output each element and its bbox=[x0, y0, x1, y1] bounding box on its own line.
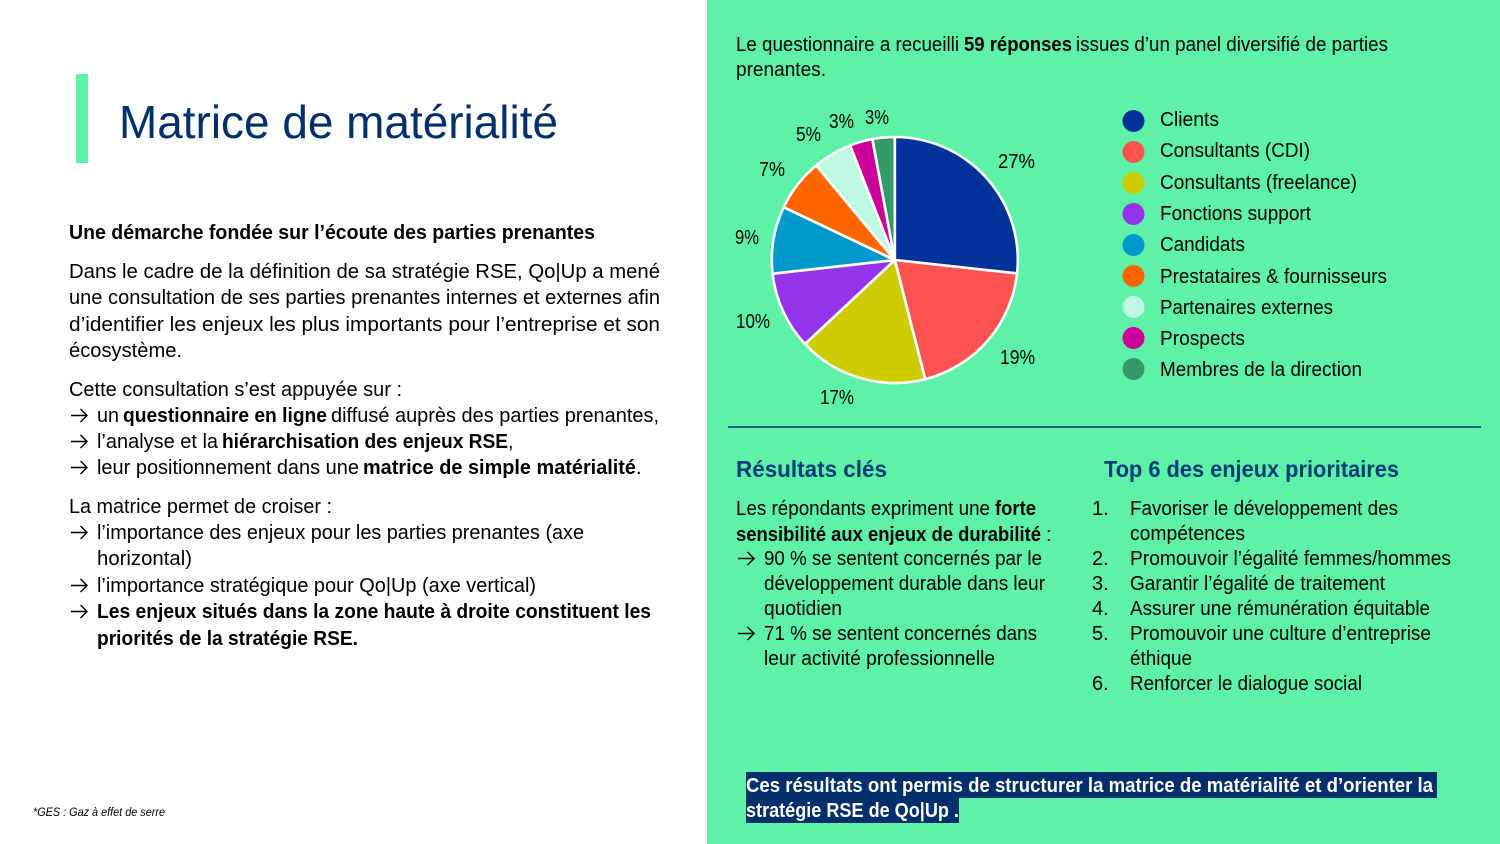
legend: Consultants (freelance) bbox=[1160, 172, 1357, 194]
intro text: responses: prenantes. bbox=[736, 59, 826, 81]
panel: right green background bbox=[707, 0, 1500, 844]
list: consultation: leur positionnement dans une bbox=[97, 457, 359, 479]
panel: top 6 bbox=[1092, 456, 1451, 695]
numbered list bbox=[1092, 498, 1451, 695]
numbered list: Renforcer le dialogue social bbox=[1130, 673, 1362, 695]
list: consultation: hiérarchisation des enjeux RSE bbox=[222, 431, 508, 453]
list: matrix axes: l’importance des enjeux pour les parties prenantes (axe bbox=[97, 522, 584, 544]
heading: key results: Résultats clés bbox=[736, 456, 887, 482]
paragraph: intro: d’identifier les enjeux les plus importants pour l’entreprise et son bbox=[69, 314, 660, 336]
numbered list: 4. bbox=[1092, 598, 1109, 620]
list: matrix axes: l’importance stratégique pour Qo|Up (axe vertical) bbox=[97, 575, 536, 597]
panel: key results bbox=[736, 456, 1052, 670]
intro text: responses bbox=[736, 34, 1388, 81]
numbered list: Assurer une rémunération équitable bbox=[1130, 598, 1430, 620]
list: consultation: l’analyse et la bbox=[97, 431, 219, 453]
list: consultation: , bbox=[508, 431, 514, 453]
intro text: responses: 59 réponses bbox=[964, 34, 1072, 56]
numbered list: 1. bbox=[1092, 498, 1109, 520]
pie percentage labels: 10% bbox=[736, 311, 770, 333]
key results text: 90 % se sentent concernés par le bbox=[764, 548, 1042, 570]
title: Matrice de matérialité bbox=[119, 96, 558, 148]
numbered list: 5. bbox=[1092, 623, 1109, 645]
legend: Candidats bbox=[1160, 234, 1245, 256]
pie percentage labels: 9% bbox=[735, 227, 759, 249]
list: consultation: diffusé auprès des parties prenantes, bbox=[331, 405, 659, 427]
callout: conclusion: Ces résultats ont permis de structurer la matrice de matérialité et d’orienter la bbox=[746, 775, 1434, 797]
numbered list: Garantir l’égalité de traitement bbox=[1130, 573, 1385, 595]
title accent bar bbox=[76, 74, 88, 163]
pie percentage labels bbox=[735, 107, 1035, 409]
legend bbox=[1122, 109, 1387, 381]
numbered list: éthique bbox=[1130, 648, 1192, 670]
paragraph: intro bbox=[69, 261, 660, 362]
numbered list: 3. bbox=[1092, 573, 1109, 595]
list: consultation bbox=[69, 379, 659, 479]
legend: Prestataires & fournisseurs bbox=[1160, 266, 1387, 288]
legend: Partenaires externes bbox=[1160, 297, 1333, 319]
list: matrix axes: La matrice permet de croiser : bbox=[69, 496, 332, 518]
callout: conclusion bbox=[746, 772, 1437, 823]
pie percentage labels: 3% bbox=[865, 107, 889, 129]
pie percentage labels: 3% bbox=[829, 111, 854, 133]
pie percentage labels: 7% bbox=[759, 159, 785, 181]
legend: Membres de la direction bbox=[1160, 359, 1362, 381]
list: consultation: . bbox=[636, 457, 642, 479]
legend: Clients bbox=[1160, 109, 1219, 131]
key results text: 71 % se sentent concernés dans bbox=[764, 623, 1037, 645]
pie percentage labels: 17% bbox=[820, 387, 854, 409]
list: matrix axes bbox=[69, 496, 651, 650]
paragraph: intro: une consultation de ses parties prenantes internes et externes afin bbox=[69, 287, 660, 309]
key results text: forte bbox=[995, 498, 1036, 520]
list: consultation: questionnaire en ligne bbox=[123, 405, 327, 427]
legend: Fonctions support bbox=[1160, 203, 1311, 225]
numbered list: compétences bbox=[1130, 523, 1245, 545]
list: matrix axes: priorités de la stratégie RSE. bbox=[97, 628, 358, 650]
list: consultation: matrice de simple matérialité bbox=[363, 457, 636, 479]
key results text: sensibilité aux enjeux de durabilité bbox=[736, 524, 1041, 546]
key results text bbox=[736, 498, 1052, 670]
paragraph: intro: Dans le cadre de la définition de sa stratégie RSE, Qo|Up a mené bbox=[69, 261, 660, 283]
heading: top 6: Top 6 des enjeux prioritaires bbox=[1104, 456, 1399, 482]
paragraph: intro: écosystème. bbox=[69, 340, 182, 362]
numbered list: 6. bbox=[1092, 673, 1109, 695]
intro text: responses: issues d’un panel diversifié de parties bbox=[1076, 34, 1388, 56]
key results text: quotidien bbox=[764, 598, 842, 620]
subheading: Une démarche fondée sur l’écoute des parties prenantes bbox=[69, 222, 595, 244]
list: consultation: un bbox=[97, 405, 119, 427]
numbered list: Promouvoir l’égalité femmes/hommes bbox=[1130, 548, 1451, 570]
pie percentage labels: 19% bbox=[1000, 347, 1035, 369]
pie percentage labels: 27% bbox=[998, 151, 1035, 173]
numbered list: Promouvoir une culture d’entreprise bbox=[1130, 623, 1431, 645]
legend: Consultants (CDI) bbox=[1160, 140, 1310, 162]
key results text: leur activité professionnelle bbox=[764, 648, 995, 670]
key results text: Les répondants expriment une bbox=[736, 498, 990, 520]
footnote: *GES : Gaz à effet de serre bbox=[33, 805, 165, 819]
intro text: responses: Le questionnaire a recueilli bbox=[736, 34, 959, 56]
text block: approach bbox=[69, 222, 660, 650]
legend: Prospects bbox=[1160, 328, 1245, 350]
callout: conclusion: stratégie RSE de Qo|Up . bbox=[746, 800, 959, 822]
numbered list: 2. bbox=[1092, 548, 1109, 570]
numbered list: Favoriser le développement des bbox=[1130, 498, 1398, 520]
list: consultation: Cette consultation s’est appuyée sur : bbox=[69, 379, 402, 401]
key results text: développement durable dans leur bbox=[764, 573, 1045, 595]
list: matrix axes: Les enjeux situés dans la zone haute à droite constituent les bbox=[97, 601, 651, 623]
list: matrix axes: horizontal) bbox=[97, 548, 192, 570]
key results text: : bbox=[1046, 524, 1052, 546]
pie chart bbox=[772, 137, 1018, 383]
pie percentage labels: 5% bbox=[796, 124, 821, 146]
